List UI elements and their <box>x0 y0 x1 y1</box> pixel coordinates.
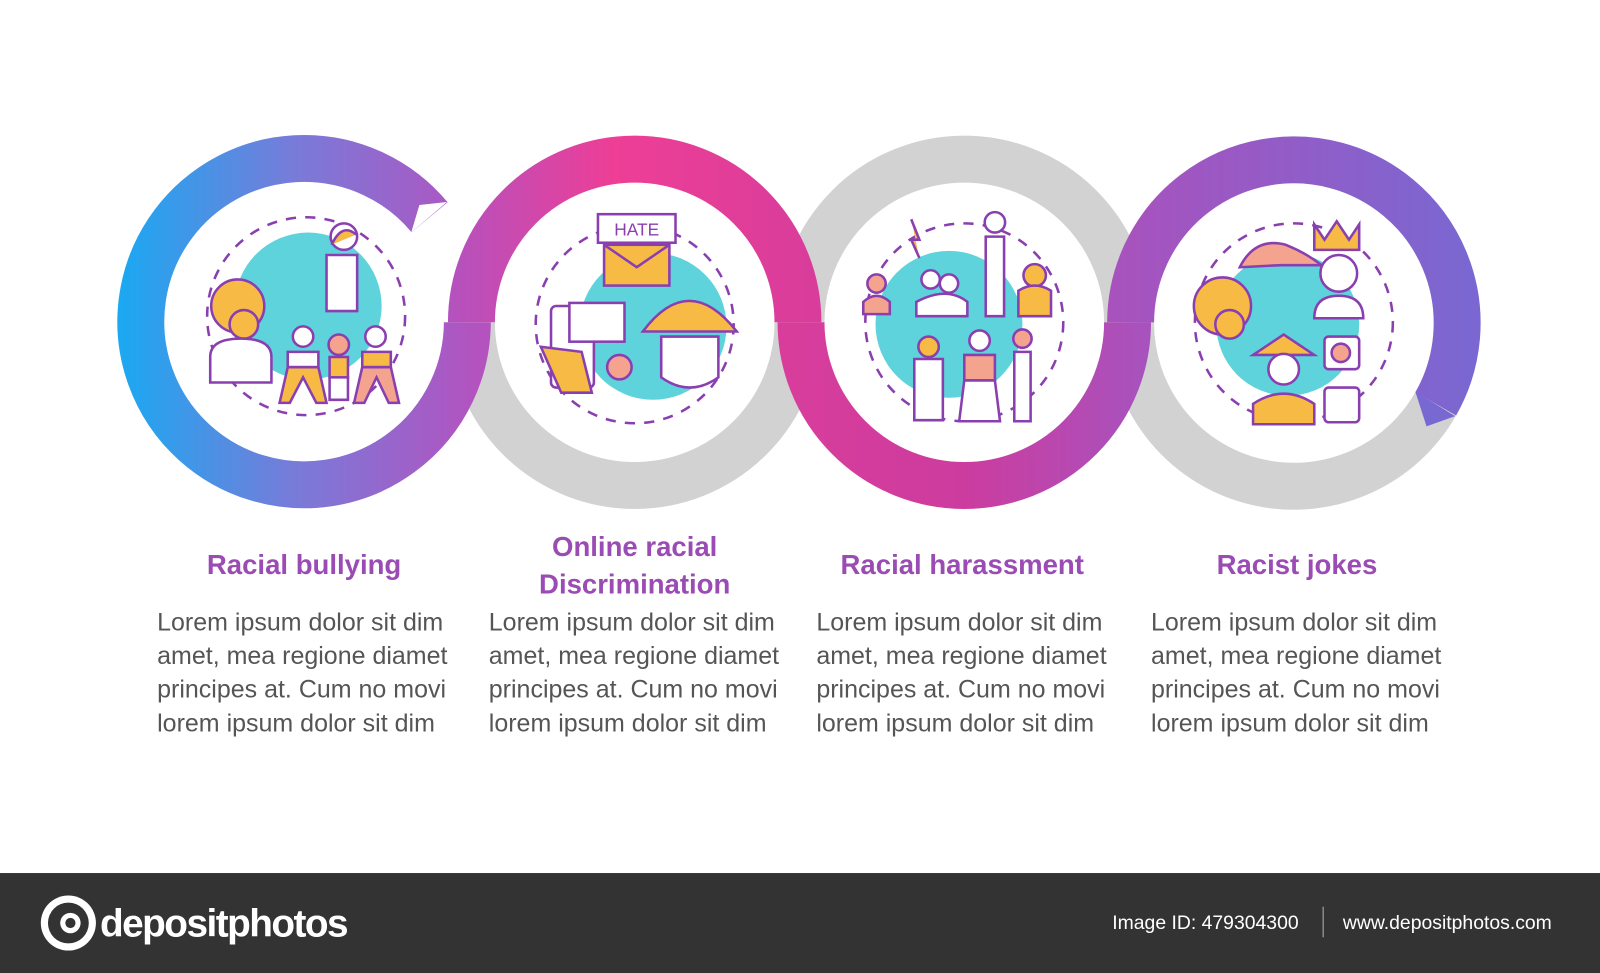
text block 1: Lorem ipsum dolor sit dim <box>157 608 443 636</box>
circle 2: online discrimination icon: HATE <box>614 220 659 240</box>
text block 1: principes at. Cum no movi <box>157 676 446 704</box>
text block 3: amet, mea regione diamet <box>816 642 1107 670</box>
text block 2: lorem ipsum dolor sit dim <box>489 709 767 737</box>
circle 3: racial harassment icon <box>826 184 1103 461</box>
footer bar: www.depositphotos.com <box>1342 912 1552 934</box>
footer bar: depositphotos <box>100 902 347 945</box>
text block 4: Lorem ipsum dolor sit dim <box>1151 608 1437 636</box>
text block 2: principes at. Cum no movi <box>489 676 778 704</box>
text block 1: lorem ipsum dolor sit dim <box>157 709 435 737</box>
text block 4: principes at. Cum no movi <box>1151 676 1440 704</box>
circle 1: racial bullying icon <box>165 184 443 461</box>
title: Online racial Discrimination: Discrimination <box>539 569 730 600</box>
text block 2: amet, mea regione diamet <box>489 642 779 670</box>
text block 4: amet, mea regione diamet <box>1151 642 1441 670</box>
circle 4: racist jokes icon <box>1155 184 1433 461</box>
title: Racist jokes: Racist jokes <box>1217 549 1377 580</box>
title: Racial bullying: Racial bullying <box>207 549 401 580</box>
text block 3: lorem ipsum dolor sit dim <box>816 709 1094 737</box>
text block 3: Lorem ipsum dolor sit dim <box>816 608 1102 636</box>
circle 2: online discrimination icon <box>496 184 773 461</box>
footer bar: Image ID: 479304300 <box>1112 912 1299 934</box>
wave ribbon <box>141 158 1457 486</box>
title: Racial harassment: Racial harassment <box>841 549 1084 580</box>
text block 3: principes at. Cum no movi <box>816 676 1105 704</box>
title: Online racial Discrimination: Online racial <box>552 531 717 562</box>
footer bar <box>0 873 1600 973</box>
text block 2: Lorem ipsum dolor sit dim <box>489 608 775 636</box>
text block 1: amet, mea regione diamet <box>157 642 448 670</box>
text block 4: lorem ipsum dolor sit dim <box>1151 709 1429 737</box>
icon: depositphotos logo <box>41 895 96 951</box>
